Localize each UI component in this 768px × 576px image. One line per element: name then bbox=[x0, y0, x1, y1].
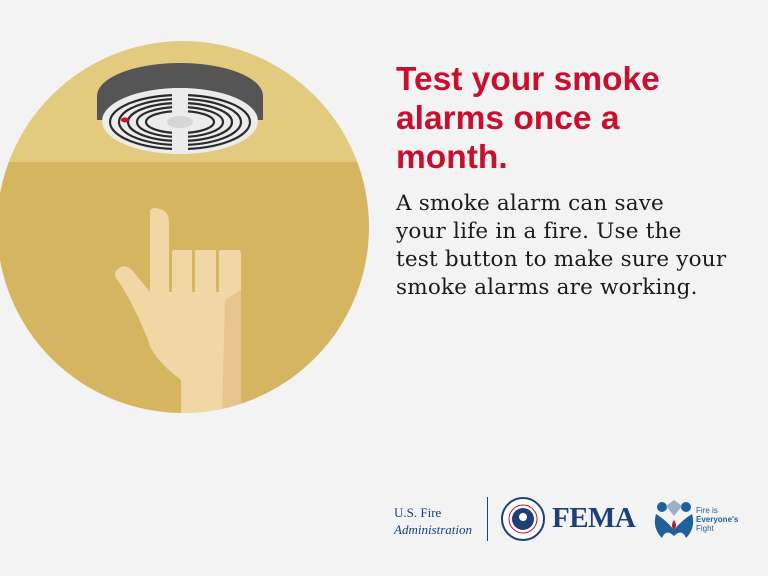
logo: DHS seal bbox=[501, 497, 545, 541]
text block: body: smoke alarms are working. bbox=[396, 275, 698, 300]
title: Test your smoke bbox=[396, 61, 660, 98]
illustration: circle with smoke alarm and hand bbox=[0, 41, 369, 413]
title: alarms once a bbox=[396, 100, 619, 137]
logo: U.S. Fire Administration: Administration bbox=[394, 522, 472, 537]
logo: Fire is Everyone's Fight: Fire is bbox=[696, 506, 718, 515]
text block: body bbox=[396, 191, 726, 300]
logo: U.S. Fire Administration bbox=[393, 505, 472, 537]
logo: U.S. Fire Administration: U.S. Fire bbox=[394, 505, 441, 520]
logo: Fire is Everyone's Fight: Everyone's bbox=[696, 515, 738, 524]
icon: smoke alarm bbox=[97, 63, 263, 154]
text block: body: A smoke alarm can save bbox=[396, 191, 664, 216]
logo: Fire is Everyone's Fight bbox=[654, 500, 738, 538]
title bbox=[396, 61, 660, 176]
title: month. bbox=[396, 139, 508, 176]
logo: FEMA: FEMA bbox=[552, 502, 635, 534]
icon: hand pressing bbox=[115, 208, 241, 420]
text block: body: your life in a fire. Use the bbox=[396, 219, 682, 244]
logo: Fire is Everyone's Fight: Fight bbox=[696, 524, 714, 533]
text block: body: test button to make sure your bbox=[396, 247, 726, 272]
